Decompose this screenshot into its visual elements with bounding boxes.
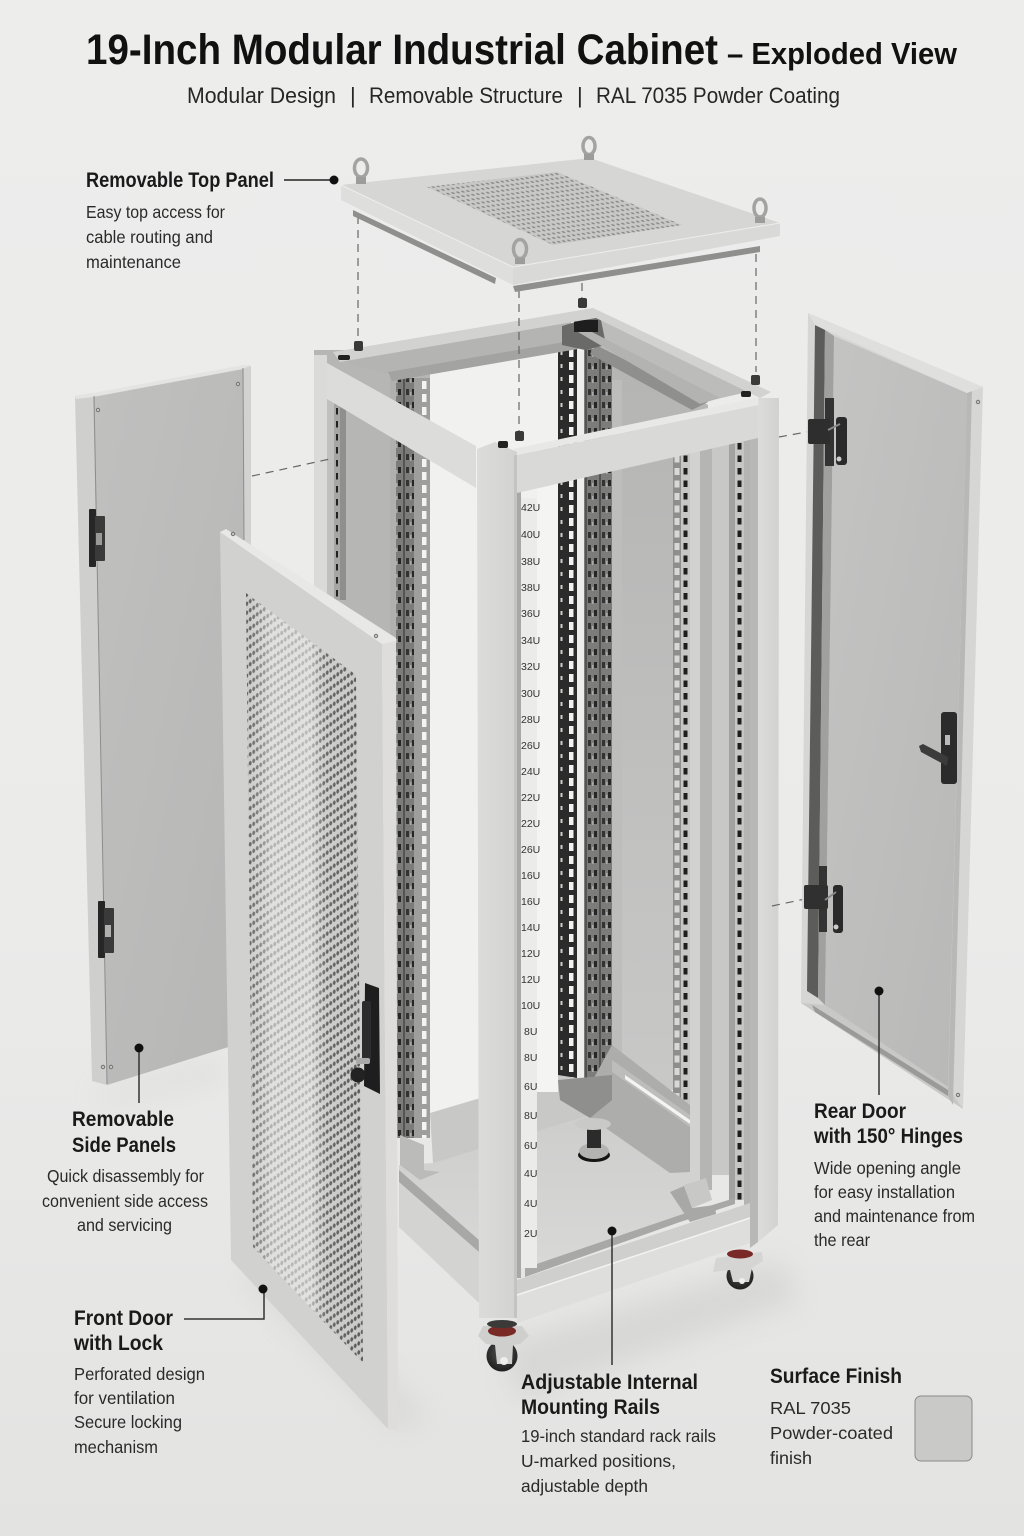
callout: rear door with hinges bbox=[813, 1100, 975, 1250]
front right top beam bbox=[513, 398, 758, 493]
callout: removable side panels: and servicing bbox=[77, 1215, 172, 1235]
callout: adjustable internal mounting rails: Adjustable Internal bbox=[521, 1371, 698, 1394]
back wall panel bbox=[608, 345, 708, 1090]
front left post bbox=[477, 442, 517, 1318]
callout: surface finish bbox=[770, 1365, 972, 1468]
front caster bbox=[478, 1320, 529, 1372]
top vent perforation bbox=[427, 172, 682, 245]
icon: side latch upper bbox=[89, 509, 105, 567]
back bottom beam bbox=[430, 1075, 590, 1163]
cabinet frame exploded bbox=[314, 308, 779, 1372]
panel: top panel bbox=[341, 138, 780, 292]
callout: rear door with hinges: the rear bbox=[814, 1230, 870, 1250]
callout: rear door with hinges: and maintenance from bbox=[814, 1206, 975, 1226]
callout: adjustable internal mounting rails: adjustable depth bbox=[521, 1476, 648, 1496]
callout: removable top panel bbox=[86, 169, 274, 272]
callout connector: rails bbox=[608, 1226, 616, 1365]
callout: removable top panel: maintenance bbox=[86, 252, 181, 272]
U-scale strip: 28U bbox=[521, 714, 540, 726]
callout: adjustable internal mounting rails: 19-inch standard rack rails bbox=[521, 1426, 716, 1446]
U-scale strip: 16U bbox=[521, 896, 540, 908]
colour swatch bbox=[915, 1396, 972, 1461]
callout: removable side panels bbox=[42, 1108, 208, 1235]
icon: upper hinge bbox=[808, 398, 847, 466]
U-scale strip: 6U bbox=[524, 1081, 537, 1093]
U-scale strip: 4U bbox=[524, 1168, 537, 1180]
callout: front door with lock: Secure locking bbox=[74, 1412, 182, 1432]
right front post bbox=[750, 398, 779, 1248]
back mounting rails bbox=[558, 345, 622, 1095]
icon: lower hinge bbox=[804, 866, 843, 933]
rails beneath top panel bbox=[353, 210, 760, 292]
U-scale strip: 12U bbox=[521, 948, 540, 960]
callout: front door with lock bbox=[73, 1307, 205, 1457]
back top beam bbox=[340, 318, 576, 374]
top rim bbox=[333, 308, 771, 398]
title: 19-Inch Modular Industrial Cabinet bbox=[86, 26, 718, 74]
callout: surface finish: Powder-coated bbox=[770, 1423, 893, 1443]
callout: surface finish: Surface Finish bbox=[770, 1365, 902, 1388]
back left post bbox=[314, 355, 346, 610]
icon: door lock bbox=[350, 983, 380, 1094]
U-scale strip: 22U bbox=[521, 818, 540, 830]
floor bbox=[399, 1110, 690, 1265]
eye bolts bbox=[354, 138, 766, 264]
door perforation bbox=[246, 593, 363, 1363]
callout: rear door with hinges: Wide opening angle bbox=[814, 1158, 961, 1178]
top corner bracket bbox=[562, 315, 720, 404]
panel: rear door bbox=[801, 313, 983, 1109]
callout: removable top panel: Easy top access for bbox=[86, 202, 225, 222]
callout: rear door with hinges: for easy installation bbox=[814, 1182, 955, 1202]
callout connector: front door bbox=[184, 1284, 268, 1319]
left side inner panel bbox=[314, 350, 430, 650]
U-scale strip: 4U bbox=[524, 1198, 537, 1210]
front bottom rail bbox=[517, 1218, 750, 1323]
front rail top face bbox=[517, 1203, 750, 1295]
U-scale strip: 8U bbox=[524, 1026, 537, 1038]
callout: front door with lock: mechanism bbox=[74, 1437, 158, 1457]
icon: rear handle bbox=[919, 712, 957, 784]
subtitle: | bbox=[350, 83, 356, 108]
U-scale strip bbox=[517, 480, 558, 1278]
icon: side latch lower bbox=[98, 901, 114, 958]
callout: front door with lock: for ventilation bbox=[74, 1388, 175, 1408]
adjustable foot bbox=[575, 1118, 611, 1162]
right bottom beam bbox=[590, 1045, 690, 1173]
front bottom inner strip bbox=[525, 1198, 735, 1277]
U-scale strip: 2U bbox=[524, 1228, 537, 1240]
U-scale strip: 26U bbox=[521, 844, 540, 856]
U-scale strip: 38U bbox=[521, 556, 540, 568]
U-scale strip: 32U bbox=[521, 661, 540, 673]
U-scale strip: 8U bbox=[524, 1052, 537, 1064]
U-scale strip: 22U bbox=[521, 792, 540, 804]
callout: front door with lock: with Lock bbox=[73, 1332, 163, 1355]
callout: adjustable internal mounting rails: U-marked positions, bbox=[521, 1451, 676, 1471]
interior gap showing through bbox=[430, 345, 560, 1125]
U-scale strip: 40U bbox=[521, 529, 540, 541]
callout: removable side panels: Removable bbox=[72, 1108, 174, 1131]
U-scale strip: 36U bbox=[521, 608, 540, 620]
left bottom beams bbox=[399, 1170, 479, 1303]
callout: front door with lock: Perforated design bbox=[74, 1364, 205, 1384]
callout: surface finish: RAL 7035 bbox=[770, 1398, 851, 1418]
callout: removable side panels: convenient side access bbox=[42, 1191, 208, 1211]
right back top beam bbox=[590, 318, 756, 402]
callout: removable side panels: Side Panels bbox=[72, 1134, 176, 1157]
callout: front door with lock: Front Door bbox=[74, 1307, 173, 1330]
callout connector: rear door bbox=[874, 986, 884, 1095]
U-scale strip: 16U bbox=[521, 870, 540, 882]
front left top beam bbox=[327, 363, 476, 488]
U-scale strip: 42U bbox=[521, 502, 540, 514]
floor shadows bbox=[95, 1052, 800, 1430]
subtitle: Modular Design bbox=[187, 83, 336, 108]
U-scale strip: 8U bbox=[524, 1110, 537, 1122]
U-scale strip: 24U bbox=[521, 766, 540, 778]
callout: adjustable internal mounting rails: Mounting Rails bbox=[521, 1396, 660, 1419]
U-scale strip: 30U bbox=[521, 688, 540, 700]
callout: removable top panel: cable routing and bbox=[86, 227, 213, 247]
right interior rails bbox=[673, 430, 750, 1205]
U-scale strip: 6U bbox=[524, 1140, 537, 1152]
subtitle: | bbox=[577, 83, 583, 108]
callout: rear door with hinges: Rear Door bbox=[814, 1100, 906, 1123]
callout: removable side panels: Quick disassembly for bbox=[47, 1166, 204, 1186]
callout: surface finish: finish bbox=[770, 1448, 812, 1468]
panel: front door bbox=[220, 529, 398, 1430]
center corner bracket bbox=[558, 1075, 612, 1118]
U-scale strip: 14U bbox=[521, 922, 540, 934]
U-scale strip: 34U bbox=[521, 635, 540, 647]
left bracket bbox=[400, 1135, 440, 1180]
right caster bbox=[713, 1250, 763, 1290]
callout: removable top panel: Removable Top Panel bbox=[86, 169, 274, 192]
U-scale strip: 12U bbox=[521, 974, 540, 986]
callout connector: side panels bbox=[134, 1044, 144, 1103]
panel: side panel bbox=[75, 365, 251, 1085]
subtitle bbox=[187, 83, 840, 108]
callout: rear door with hinges: with 150° Hinges bbox=[813, 1125, 963, 1148]
title: – Exploded View bbox=[727, 36, 958, 71]
right bottom bracket bbox=[670, 1178, 716, 1222]
U-scale strip: 26U bbox=[521, 740, 540, 752]
callout: adjustable internal mounting rails bbox=[521, 1371, 716, 1496]
subtitle: RAL 7035 Powder Coating bbox=[596, 83, 840, 108]
subtitle: Removable Structure bbox=[369, 83, 563, 108]
dashed assembly guides bbox=[252, 216, 812, 906]
U-scale strip: 10U bbox=[521, 1000, 540, 1012]
fasteners bbox=[338, 298, 760, 448]
left mounting rails bbox=[390, 375, 430, 1138]
callout connector: top panel bbox=[284, 176, 338, 184]
U-scale strip: 38U bbox=[521, 582, 540, 594]
